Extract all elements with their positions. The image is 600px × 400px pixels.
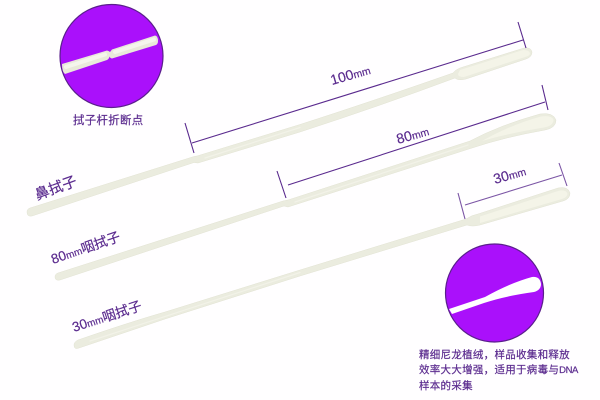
label: nasal swab: 鼻拭子 [33, 173, 79, 204]
description text: 样本的采集 [419, 379, 473, 392]
description text [419, 348, 579, 392]
label: 100mm: 100mm [328, 61, 372, 88]
caption: break point: 拭子杆折断点 [73, 113, 143, 127]
label: 30mm throat swab: 30mm咽拭子 [70, 298, 144, 335]
nasal swab [27, 48, 532, 216]
dimension: 80mm [277, 85, 548, 198]
callout: nylon flocked tip circle [446, 244, 544, 342]
description text: 效率大大增强，适用于病毒与DNA [419, 363, 579, 376]
dimension: 30mm [458, 162, 567, 219]
80mm throat swab [55, 114, 556, 280]
label: 80mm: 80mm [394, 122, 431, 147]
icon: flocked swab tip [449, 277, 541, 314]
dimension: 100mm [185, 22, 526, 153]
label: 80mm throat swab: 80mm咽拭子 [49, 229, 122, 267]
description text: 精细尼龙植绒，样品收集和释放 [419, 348, 570, 361]
label: 30mm: 30mm [491, 162, 528, 187]
icon: swab shaft break point [62, 36, 158, 74]
callout: break point circle [60, 4, 163, 108]
30mm throat swab [74, 188, 570, 349]
